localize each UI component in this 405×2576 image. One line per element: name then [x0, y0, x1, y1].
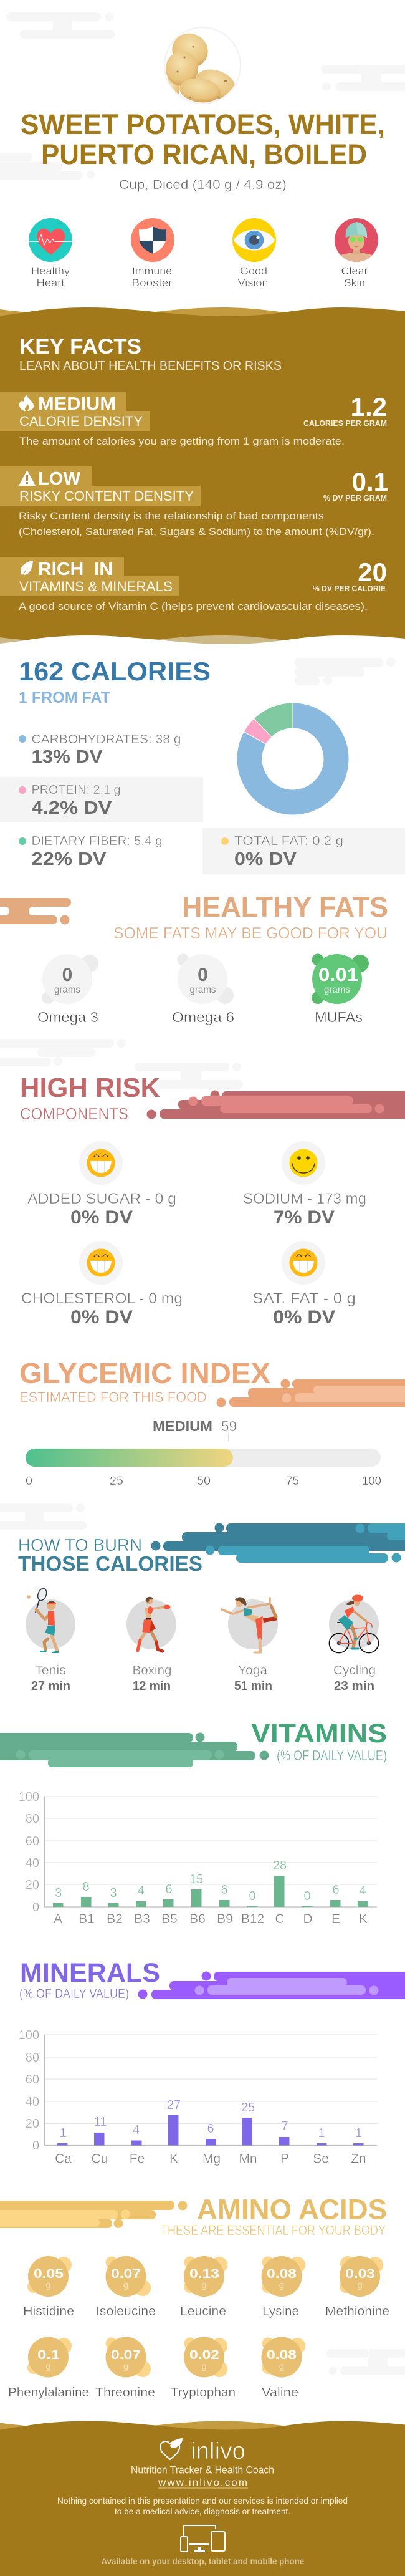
amino: leucine: g [201, 2280, 207, 2290]
amino: threonine: g [123, 2361, 128, 2372]
omega 3: grams [54, 985, 80, 995]
decorative band [0, 1732, 269, 1767]
fact: risky content density: RISKY CONTENT DENSITY [19, 488, 194, 504]
heading: HOW TO BURN [18, 1535, 142, 1555]
bar chart: minerals: Fe [130, 2151, 145, 2166]
heading: ESTIMATED FOR THIS FOOD [19, 1389, 207, 1405]
panel: high risk [20, 1073, 405, 1328]
item: saturated fat: SAT. FAT - 0 g [252, 1290, 356, 1307]
glycemic scale: 75 [286, 1475, 299, 1488]
amino: phenylalanine [8, 2337, 89, 2400]
legend: total fat [202, 828, 405, 874]
amino: isoleucine: Isoleucine [96, 2305, 156, 2318]
bar chart: vitamins: 15 [189, 1873, 203, 1886]
bar chart: vitamins: 8 [82, 1880, 90, 1894]
fact: risky content density: Risky Content density is the relationship of bad components [19, 511, 324, 522]
item: saturated fat: 0% DV [273, 1307, 335, 1328]
heading: GLYCEMIC INDEX [19, 1357, 270, 1389]
bar chart: minerals: 80 [26, 2051, 39, 2065]
panel: healthy fats [0, 891, 388, 1025]
activity: tennis: 27 min [31, 1679, 70, 1693]
glycemic scale: 0 [26, 1475, 32, 1488]
bar chart: minerals: Ca [55, 2151, 72, 2166]
bar chart: vitamins: 0 [249, 1889, 256, 1903]
amino: tryptophan [171, 2337, 236, 2400]
icon: boxer [138, 1597, 171, 1651]
heading [20, 1073, 160, 1123]
amino: threonine [95, 2337, 155, 2400]
panel: vitamins [0, 1719, 387, 1926]
activity: cycling: 23 min [334, 1679, 374, 1693]
bar chart: minerals: 27 [167, 2098, 181, 2112]
panel: key facts [0, 307, 405, 652]
amino: phenylalanine: g [45, 2361, 51, 2372]
item: cholesterol [21, 1241, 183, 1328]
title: PUERTO RICAN, BOILED [41, 138, 367, 170]
benefit labels: Skin [344, 277, 365, 289]
bar chart: vitamins: B5 [161, 1912, 178, 1926]
bar chart: minerals: 100 [19, 2028, 39, 2042]
bar chart: minerals: 60 [26, 2073, 39, 2086]
bar chart: vitamins: E [331, 1912, 340, 1926]
mufas: grams [324, 985, 350, 995]
item: cholesterol: 0% DV [70, 1307, 133, 1328]
bar chart: vitamins: 60 [26, 1835, 39, 1848]
fact: rich in vitamins and minerals: % DV PER CALORIE [313, 584, 386, 593]
amino: tryptophan: g [201, 2361, 207, 2372]
fact: calorie density: 1.2 [351, 392, 387, 422]
mufas: MUFAs [315, 1009, 363, 1025]
amino: lysine: Lysine [262, 2305, 299, 2318]
decorative band [151, 1523, 405, 1563]
omega 3: 0 [62, 965, 72, 985]
heading: 1 FROM FAT [19, 689, 110, 707]
activity: boxing: Boxing [132, 1664, 172, 1677]
heading [19, 1958, 160, 2001]
item: sodium: SODIUM - 173 mg [243, 1190, 366, 1207]
bar chart: vitamins: 100 [19, 1790, 39, 1804]
amino: isoleucine: g [123, 2280, 128, 2290]
bar chart: vitamins: 20 [26, 1878, 39, 1892]
omega 3: Omega 3 [37, 1009, 98, 1025]
glycemic scale: 100 [362, 1475, 381, 1488]
bar chart: vitamins: 6 [332, 1883, 340, 1897]
icon: grin face [87, 1149, 115, 1177]
amino: valine: 0.08 [267, 2348, 297, 2362]
benefit labels: Healthy [31, 265, 70, 277]
bar chart: minerals: 0 [32, 2139, 39, 2153]
benefit labels: Heart [36, 277, 65, 289]
heading: MINERALS [20, 1958, 160, 1988]
activity: boxing: 12 min [133, 1679, 171, 1693]
panel: minerals [19, 1958, 405, 2166]
icon: devices [181, 2525, 225, 2552]
fact: risky content density: LOW [38, 469, 81, 489]
benefit labels: Clear [341, 265, 368, 277]
bar chart: minerals: Zn [351, 2151, 366, 2166]
bar chart: minerals: 1 [318, 2126, 325, 2140]
fact: risky content density [0, 466, 388, 538]
icon: healthy heart [29, 218, 72, 262]
decorative band [138, 1972, 405, 1999]
activity: yoga [222, 1597, 278, 1693]
bar chart: vitamins: C [275, 1912, 285, 1926]
top wave [0, 307, 405, 649]
glycemic scale: 25 [110, 1475, 123, 1488]
title: SWEET POTATOES, WHITE, [21, 109, 385, 140]
mufas: 0.01 [318, 965, 358, 985]
serving size: Cup, Diced (140 g / 4.9 oz) [119, 178, 287, 192]
bar chart: vitamins: B12 [241, 1912, 264, 1926]
heading [18, 1535, 202, 1575]
heading [19, 657, 211, 707]
legend: protein: 4.2% DV [31, 798, 112, 818]
icon: good vision [232, 218, 276, 262]
bar chart: minerals: 1 [355, 2126, 362, 2140]
amino: phenylalanine: Phenylalanine [8, 2386, 89, 2400]
amino: methionine: 0.03 [345, 2267, 375, 2281]
amino: lysine [262, 2256, 305, 2318]
activity: yoga: Yoga [238, 1664, 268, 1677]
logo: inlivo [191, 2438, 245, 2464]
heading: VITAMINS [251, 1719, 387, 1749]
legend: total fat: TOTAL FAT: 0.2 g [234, 834, 343, 848]
bar chart: vitamins: 40 [26, 1856, 39, 1870]
amino: valine: g [279, 2361, 284, 2372]
omega 6: grams [189, 985, 216, 995]
icon: yoga pose [222, 1597, 277, 1652]
bar chart: vitamins: 3 [55, 1886, 62, 1900]
glycemic scale: 50 [197, 1475, 211, 1488]
activity: tennis [26, 1587, 75, 1693]
bar chart: minerals: 7 [281, 2120, 288, 2133]
amino: histidine [23, 2256, 74, 2318]
amino: methionine: Methionine [325, 2305, 389, 2318]
heading [251, 1719, 387, 1763]
bar chart: vitamins: B6 [189, 1912, 206, 1926]
decorative clouds top [0, 12, 405, 180]
bar chart: minerals: Se [313, 2151, 329, 2166]
heading [161, 2194, 387, 2238]
item: sodium [243, 1141, 366, 1228]
legend: dietary fiber: DIETARY FIBER: 5.4 g [31, 834, 162, 848]
fact: rich in vitamins and minerals: RICH IN [38, 559, 113, 579]
heading: (% OF DAILY VALUE) [19, 1987, 129, 2001]
item: cholesterol: CHOLESTEROL - 0 mg [21, 1290, 183, 1307]
fact: risky content density: 0.1 [352, 467, 388, 496]
bar chart: vitamins: B1 [79, 1912, 95, 1926]
benefit labels: Immune [132, 265, 172, 277]
bar chart: vitamins: B2 [107, 1912, 123, 1926]
availability note: Available on your desktop, tablet and mobile phone [101, 2556, 304, 2566]
bar chart: vitamins: 28 [273, 1859, 287, 1873]
item: saturated fat [252, 1241, 356, 1328]
heading [19, 1357, 270, 1405]
icon: grin face [87, 1248, 115, 1277]
decorative cloud [326, 2349, 405, 2375]
amino: leucine [180, 2256, 227, 2318]
food image: potatoes [164, 27, 241, 105]
amino: threonine: Threonine [95, 2386, 155, 2400]
bar chart: vitamins: 6 [221, 1883, 228, 1897]
activity: cycling: Cycling [333, 1664, 376, 1677]
amino: lysine: 0.08 [267, 2267, 297, 2281]
item: added sugar: 0% DV [70, 1207, 133, 1228]
amino: histidine: 0.05 [34, 2267, 64, 2281]
amino: histidine: g [45, 2280, 51, 2290]
amino: threonine: 0.07 [111, 2348, 141, 2362]
fact: rich in vitamins and minerals: 20 [358, 557, 387, 587]
activity: yoga: 51 min [234, 1679, 272, 1693]
bar chart: minerals: 1 [59, 2126, 67, 2140]
omega 6: Omega 6 [172, 1009, 234, 1025]
bar chart: minerals: 6 [207, 2122, 214, 2136]
omega 3 [37, 954, 98, 1025]
title [21, 109, 385, 170]
benefit labels: Vision [238, 277, 268, 289]
heading: SOME FATS MAY BE GOOD FOR YOU [113, 924, 388, 942]
activity: boxing [126, 1597, 176, 1693]
bottom wave [0, 635, 405, 652]
heading: 162 CALORIES [19, 657, 211, 686]
bar chart: vitamins: 0 [32, 1901, 39, 1914]
amino: isoleucine: 0.07 [111, 2267, 141, 2281]
decorative clouds [0, 1039, 243, 1089]
bar chart: minerals: Cu [92, 2151, 108, 2166]
donut chart [237, 703, 349, 815]
glycemic scale [26, 1475, 381, 1488]
fact: calorie density: CALORIE DENSITY [19, 413, 143, 429]
legend: carbohydrates: 13% DV [31, 747, 103, 767]
benefit labels: Good [240, 265, 267, 277]
heading [19, 335, 282, 373]
bar chart: minerals [19, 2028, 377, 2166]
amino: lysine: g [279, 2280, 284, 2290]
heading: THOSE CALORIES [18, 1552, 202, 1575]
fact: calorie density: CALORIES PER GRAM [303, 418, 387, 428]
bar chart: minerals: Mg [202, 2151, 221, 2166]
disclaimer: to be a medical advice, diagnosis or treatment. [115, 2506, 290, 2516]
icon: grin face [289, 1248, 318, 1277]
icon: immune booster [131, 218, 174, 262]
amino: leucine: Leucine [180, 2305, 226, 2318]
disclaimer [57, 2496, 348, 2516]
icon: tennis player [27, 1587, 59, 1653]
bar chart: minerals: 40 [26, 2095, 39, 2109]
bar chart: minerals: 25 [241, 2101, 255, 2115]
activity: tennis: Tenis [35, 1664, 66, 1677]
mufas [312, 954, 369, 1025]
bar chart: minerals: 11 [94, 2115, 107, 2129]
bar chart: vitamins: 3 [110, 1886, 117, 1900]
legend: protein [0, 777, 203, 822]
legend: total fat: 0% DV [234, 849, 297, 869]
glycemic value: MEDIUM [153, 1418, 212, 1434]
fact: rich in vitamins and minerals: VITAMINS & MINERALS [19, 579, 173, 594]
tagline and website: Nutrition Tracker & Health Coach [131, 2464, 274, 2476]
bar chart: vitamins: B9 [217, 1912, 233, 1926]
bar chart: minerals: K [169, 2151, 178, 2166]
decorative band [147, 1090, 405, 1119]
decorative band [217, 1379, 405, 1407]
amino: tryptophan: Tryptophan [171, 2386, 236, 2400]
omega 6: 0 [198, 965, 208, 985]
bar chart: vitamins [19, 1790, 377, 1926]
item: added sugar: ADDED SUGAR - 0 g [27, 1190, 176, 1207]
amino: methionine: g [357, 2280, 363, 2290]
decorative band [0, 2201, 187, 2228]
bar chart: vitamins: 4 [359, 1884, 366, 1898]
heading: LEARN ABOUT HEALTH BENEFITS OR RISKS [19, 359, 282, 373]
decorative band [0, 898, 71, 924]
amino: phenylalanine: 0.1 [37, 2348, 60, 2362]
amino: leucine: 0.13 [189, 2267, 219, 2281]
item: added sugar [27, 1141, 176, 1228]
fact: rich in vitamins and minerals: A good source of Vitamin C (helps prevent cardiovascular diseases). [19, 601, 368, 612]
amino: tryptophan: 0.02 [189, 2348, 219, 2362]
bar chart: vitamins: B3 [134, 1912, 150, 1926]
amino: valine: Valine [262, 2386, 298, 2400]
panel: footer [0, 2421, 405, 2576]
bar chart: vitamins: D [303, 1912, 313, 1926]
bar chart: minerals: Mn [239, 2151, 257, 2166]
bar chart: vitamins: 4 [137, 1884, 145, 1898]
omega 6 [172, 954, 234, 1025]
amino: isoleucine [96, 2256, 156, 2318]
legend: protein: PROTEIN: 2.1 g [31, 783, 121, 797]
icon: clear skin [335, 218, 378, 262]
fact: calorie density: MEDIUM [38, 394, 116, 414]
heading: KEY FACTS [19, 335, 141, 359]
heading [113, 891, 388, 942]
bar chart: vitamins: 0 [303, 1889, 311, 1903]
footer wave [0, 2421, 405, 2576]
fact: risky content density: (Cholesterol, Saturated Fat, Sugars & Sodium) to the amount (%DV/gr). [19, 526, 374, 538]
benefit icons [29, 218, 378, 289]
item: sodium: 7% DV [274, 1207, 335, 1228]
bar chart: minerals: 20 [26, 2117, 39, 2131]
legend: carbohydrates: CARBOHYDRATES: 38 g [31, 733, 181, 746]
amino: histidine: Histidine [23, 2305, 74, 2318]
heading: COMPONENTS [20, 1104, 128, 1123]
fact: risky content density: % DV PER GRAM [323, 493, 387, 503]
icon: smile face [289, 1149, 318, 1177]
glycemic bar [26, 1449, 381, 1467]
bar chart: minerals: P [280, 2151, 289, 2166]
panel: how to burn those calories [18, 1523, 405, 1693]
decorative cloud [295, 658, 395, 685]
benefit labels: Booster [132, 277, 173, 289]
bar chart: vitamins: 6 [165, 1883, 173, 1896]
bar chart: vitamins: A [54, 1912, 62, 1926]
bar chart: vitamins: 80 [26, 1812, 39, 1826]
glycemic value [153, 1418, 237, 1441]
activity: cycling [329, 1595, 379, 1693]
tagline and website [131, 2464, 274, 2488]
legend: carbohydrates [19, 733, 181, 767]
amino: valine [262, 2337, 305, 2400]
decorative cloud [0, 1503, 87, 1530]
panel: glycemic index [19, 1357, 405, 1488]
logo [160, 2438, 245, 2464]
bar chart: vitamins: K [359, 1912, 368, 1926]
fact: calorie density [0, 392, 387, 447]
heading: HEALTHY FATS [182, 891, 388, 923]
amino: methionine [325, 2256, 389, 2318]
fact: calorie density: The amount of calories you are getting from 1 gram is moderate. [19, 436, 345, 447]
bar chart: minerals: 4 [133, 2123, 140, 2137]
glycemic value: 59 [221, 1418, 237, 1434]
legend: dietary fiber [19, 834, 162, 869]
panel: calories [0, 657, 405, 874]
panel: amino acids [0, 2194, 405, 2400]
heading: AMINO ACIDS [197, 2194, 387, 2225]
disclaimer: Nothing contained in this presentation and our services is intended or implied [57, 2496, 348, 2506]
tagline and website: www.inlivo.com [158, 2477, 247, 2488]
icon: cyclist [329, 1595, 379, 1652]
benefit labels [31, 265, 368, 289]
fact: rich in vitamins and minerals [0, 557, 387, 612]
legend: dietary fiber: 22% DV [31, 849, 107, 869]
heading: HIGH RISK [20, 1073, 160, 1103]
